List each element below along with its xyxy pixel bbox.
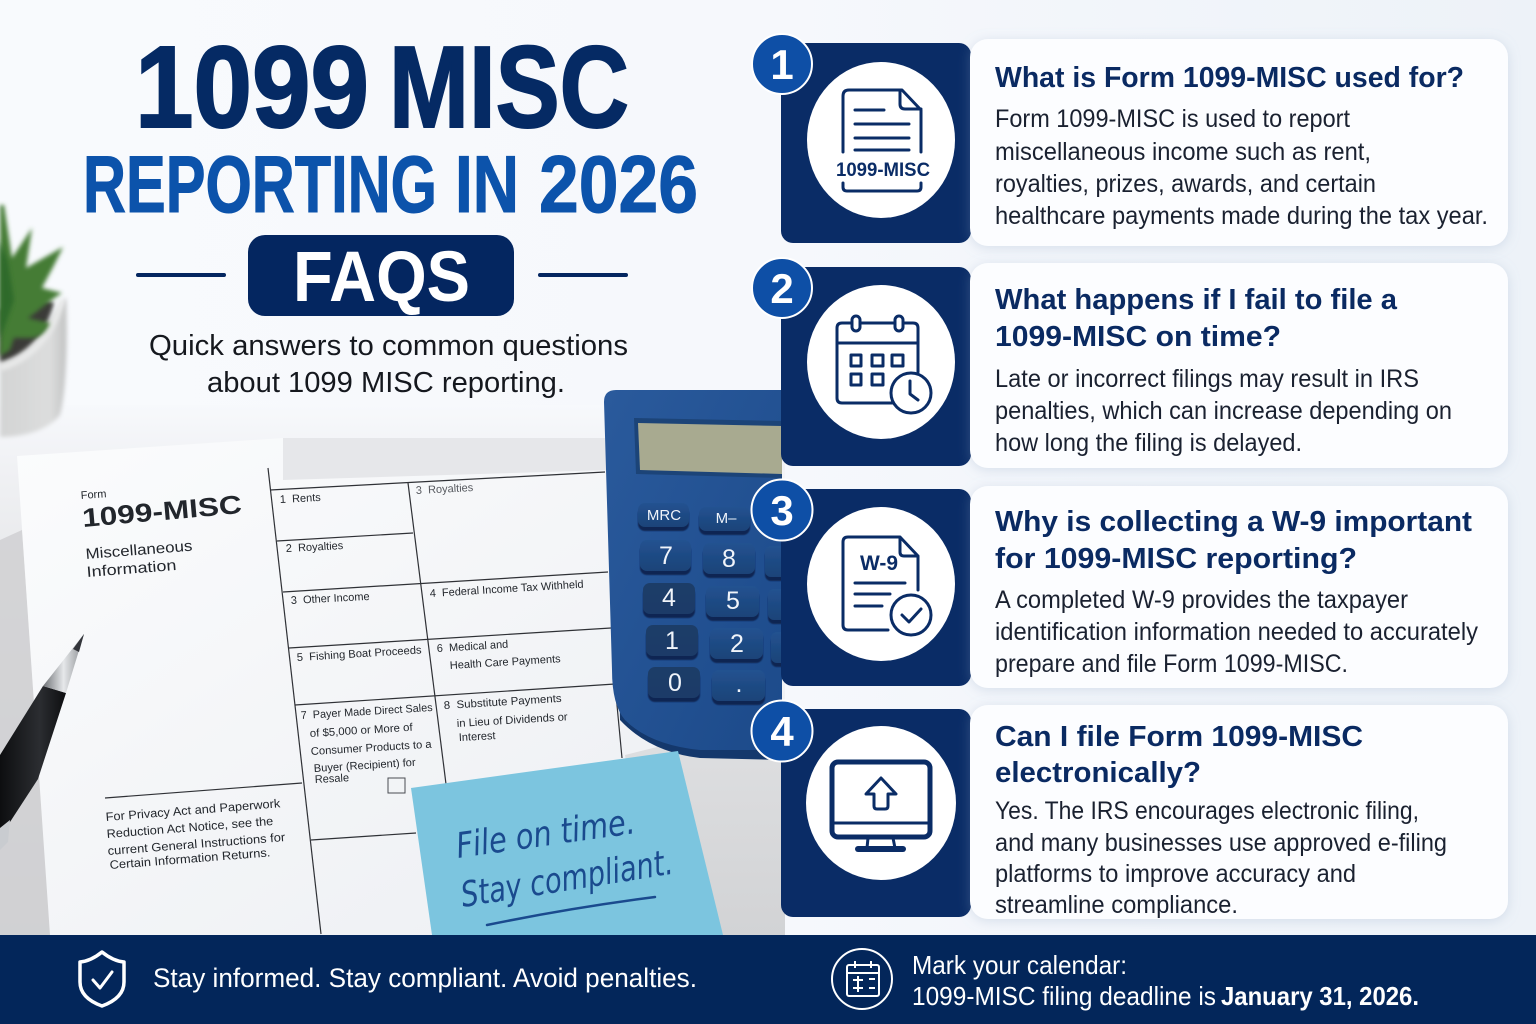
question 2: 1099-MISC on time? <box>995 321 1281 353</box>
form box labels: in Lieu of Dividends or <box>456 711 568 730</box>
form box labels: 5 Fishing Boat Proceeds <box>296 644 422 664</box>
back sheet shadow <box>283 438 608 488</box>
form box labels: 3 Royalties <box>416 482 474 497</box>
form box labels: Resale <box>315 772 349 786</box>
icon: W-9 document with check <box>807 507 955 661</box>
form box labels: 4 Federal Income Tax Withheld <box>429 579 584 600</box>
form grid lines <box>105 468 622 934</box>
icon: computer monitor with upload arrow <box>806 726 956 880</box>
sticky note: Stay compliant. <box>458 843 676 916</box>
title line 2: REPORTING <box>83 140 437 230</box>
deadline message: January 31, 2026. <box>1221 981 1419 1011</box>
answer 4: and many businesses use approved e-filing <box>995 829 1447 857</box>
safety message: Stay informed. Stay compliant. Avoid penalties. <box>153 963 697 993</box>
question 4: Can I file Form 1099-MISC <box>995 721 1363 753</box>
question 3 <box>995 506 1472 575</box>
form box labels: Consumer Products to a <box>310 739 433 758</box>
deadline message <box>912 950 1419 1011</box>
title line 1 <box>135 22 629 152</box>
question 3: Why is collecting a W-9 important <box>995 506 1472 538</box>
icon: 1099-MISC document: 1099-MISC <box>836 160 930 181</box>
calculator keys: 4 <box>662 584 676 612</box>
question 2 <box>995 284 1398 353</box>
number badge 4 <box>752 700 812 762</box>
number badge 4: 4 <box>770 708 794 755</box>
icon: calendar with clock <box>807 285 955 439</box>
title line 1: 1099 <box>135 22 369 152</box>
calculator keys: 7 <box>659 542 673 570</box>
privacy notice <box>105 796 286 872</box>
calculator keys: 5 <box>726 587 740 615</box>
form box labels: 3 Other Income <box>291 591 370 607</box>
answer card <box>970 486 1508 688</box>
icon: W-9 document with check: W-9 <box>860 552 898 575</box>
form title: Information <box>86 557 177 581</box>
sticky note: File on time. <box>454 802 638 867</box>
marble strip left of form <box>0 530 50 935</box>
deadline message: 1099-MISC filing deadline is <box>912 981 1216 1011</box>
number badge 1: 1 <box>770 41 794 88</box>
desk surface <box>0 405 785 935</box>
answer card <box>970 39 1508 246</box>
icon tile <box>781 267 971 466</box>
answer 1: healthcare payments made during the tax year. <box>995 202 1488 230</box>
panel: FAQ 2 <box>752 258 1508 468</box>
answer 2: how long the filing is delayed. <box>995 429 1302 457</box>
answer 4: Yes. The IRS encourages electronic filing, <box>995 797 1419 825</box>
icon tile <box>781 43 971 243</box>
form box labels: 1 Rents <box>280 492 322 506</box>
form box labels: Interest <box>459 730 496 744</box>
footer bar <box>0 935 1536 1024</box>
answer 2: Late or incorrect filings may result in IRS <box>995 365 1419 393</box>
answer 1 <box>995 105 1488 230</box>
form title: 1099-MISC <box>81 489 243 533</box>
calculator keys: 0 <box>668 669 682 697</box>
answer 1: Form 1099-MISC is used to report <box>995 105 1350 133</box>
question 4 <box>995 721 1363 789</box>
answer 2: penalties, which can increase depending on <box>995 397 1452 425</box>
calculator keys: 8 <box>722 545 736 573</box>
answer 1: royalties, prizes, awards, and certain <box>995 170 1376 198</box>
resale checkbox <box>388 778 405 793</box>
question 3: for 1099-MISC reporting? <box>995 543 1357 575</box>
potted plant <box>0 205 67 437</box>
icon tile <box>781 709 971 917</box>
deadline message: Mark your calendar: <box>912 950 1127 980</box>
question 1: What is Form 1099-MISC used for? <box>995 62 1464 94</box>
paper form 1099-MISC <box>17 438 785 935</box>
number badge 2: 2 <box>770 265 794 312</box>
calculator <box>604 390 795 760</box>
answer 3: identification information needed to accurately <box>995 618 1478 646</box>
title line 1: MISC <box>389 22 629 152</box>
number badge 3: 3 <box>770 487 794 534</box>
answer 2 <box>995 365 1452 457</box>
question 2: What happens if I fail to file a <box>995 284 1398 316</box>
panel: FAQ 3 <box>752 480 1508 688</box>
calculator keys: 2 <box>730 630 744 658</box>
form title: Miscellaneous <box>85 538 193 563</box>
title block <box>83 22 698 399</box>
subtitle <box>149 330 628 399</box>
form box labels: 6 Medical and <box>436 639 509 655</box>
answer 4 <box>995 797 1447 919</box>
form box labels: 2 Royalties <box>286 540 344 555</box>
subtitle: Quick answers to common questions <box>149 330 628 362</box>
panel: FAQ 4 <box>752 700 1508 919</box>
desk photo scene <box>0 205 795 935</box>
answer 3: prepare and file Form 1099-MISC. <box>995 650 1348 678</box>
question 4: electronically? <box>995 757 1201 789</box>
answer 4: streamline compliance. <box>995 891 1238 919</box>
form box labels: Health Care Payments <box>449 653 561 672</box>
privacy notice: For Privacy Act and Paperwork <box>105 796 282 824</box>
title line 2: IN <box>455 140 519 230</box>
answer card <box>970 263 1508 468</box>
sticky note <box>411 751 723 935</box>
calculator display <box>634 418 782 478</box>
form box labels: Buyer (Recipient) for <box>313 757 416 775</box>
form box labels: 8 Substitute Payments <box>443 693 562 712</box>
pen <box>0 634 84 850</box>
form title: Form <box>80 488 107 502</box>
privacy notice: Certain Information Returns. <box>109 845 271 872</box>
calculator keys: M– <box>716 510 737 527</box>
privacy notice: current General Instructions for <box>107 830 286 858</box>
privacy notice: Reduction Act Notice, see the <box>106 814 274 841</box>
number badge 2 <box>752 258 812 318</box>
answer 1: miscellaneous income such as rent, <box>995 138 1371 166</box>
form title <box>80 488 243 581</box>
form box labels: 7 Payer Made Direct Sales <box>300 702 433 722</box>
subtitle: about 1099 MISC reporting. <box>207 367 565 399</box>
answer 4: platforms to improve accuracy and <box>995 860 1356 888</box>
answer 3: A completed W-9 provides the taxpayer <box>995 586 1408 614</box>
form box labels: of $5,000 or More of <box>309 722 414 740</box>
calculator keys: . <box>736 670 742 698</box>
number badge 3 <box>752 480 812 540</box>
calculator keys <box>638 503 795 701</box>
calculator keys: MRC <box>647 507 681 524</box>
form box labels <box>280 482 584 786</box>
answer 3 <box>995 586 1478 678</box>
icon: shield with check <box>80 952 124 1006</box>
number badge 1 <box>752 34 812 94</box>
answer card <box>970 705 1508 919</box>
calculator keys: 1 <box>665 627 679 655</box>
panel: FAQ 1 <box>752 34 1508 246</box>
icon tile <box>781 489 971 686</box>
title line 2: 2026 <box>539 140 698 230</box>
icon: 1099-MISC document <box>807 62 955 218</box>
FAQs badge: FAQS <box>293 238 470 317</box>
icon: calendar in circle <box>832 949 892 1009</box>
